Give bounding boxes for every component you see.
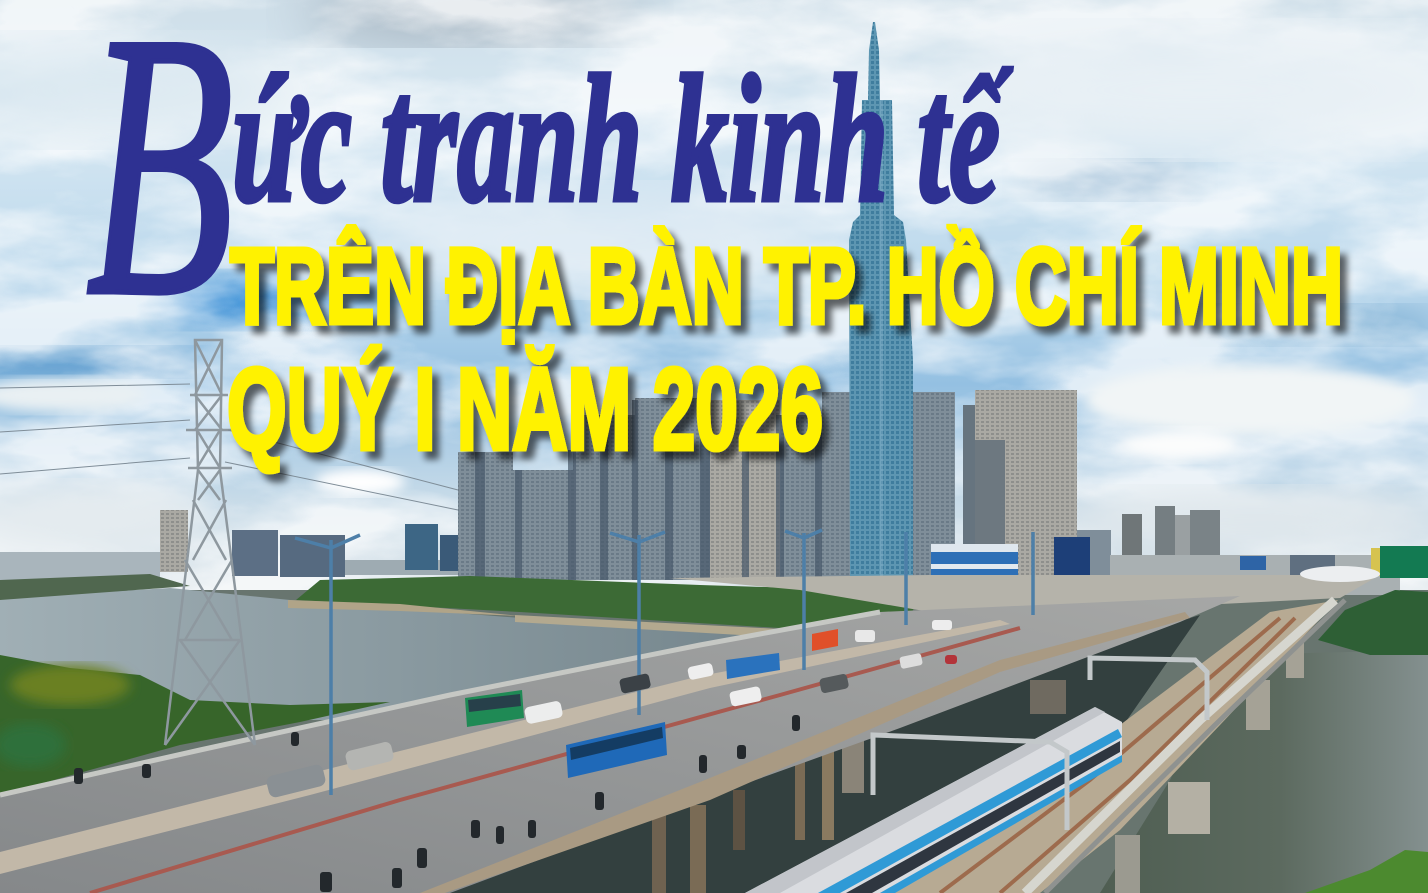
- low city band: [670, 575, 1380, 612]
- billboard blue: [1054, 537, 1090, 587]
- distant skyline right: [1075, 506, 1400, 595]
- electricity pylon: [0, 340, 458, 745]
- dark water beneath road bridge: [440, 615, 1200, 893]
- red median rail: [90, 628, 1020, 893]
- trees right bank: [1305, 590, 1428, 893]
- metro train: [745, 707, 1122, 893]
- outer guard rail: [0, 612, 880, 795]
- blue low-rise building: [931, 544, 1018, 606]
- green trees bottom left: [0, 655, 390, 795]
- yellow heading lines: QUÝ I NĂM 2026: [227, 344, 823, 474]
- metro viaduct piers: [1115, 638, 1304, 893]
- riverbank trees far: [0, 574, 925, 637]
- Landmark 81 tower: [849, 22, 913, 578]
- river left: [0, 588, 780, 720]
- yellow heading lines: [227, 225, 1343, 474]
- billboard green: [1371, 546, 1428, 578]
- catenary gantry: [873, 658, 1207, 830]
- median barrier: [0, 620, 1010, 874]
- street lamps: [295, 530, 1033, 795]
- bridge edge walkway: [420, 612, 1190, 893]
- road bridge deck: [0, 596, 1240, 893]
- script heading: [86, 0, 1013, 374]
- sky background: [0, 0, 1428, 620]
- ground and water base: [0, 590, 1428, 893]
- river right: [1100, 650, 1428, 893]
- script heading: ức tranh kinh tế: [232, 39, 1013, 240]
- title block: [86, 0, 1343, 474]
- distant skyline left: [0, 510, 460, 582]
- bridge piers: [652, 680, 1066, 893]
- metro viaduct: [870, 600, 1345, 893]
- cars and motorbikes: [74, 620, 957, 892]
- white station roof: [1300, 566, 1380, 582]
- buses: [465, 629, 838, 778]
- high-rise cluster: [458, 390, 1077, 580]
